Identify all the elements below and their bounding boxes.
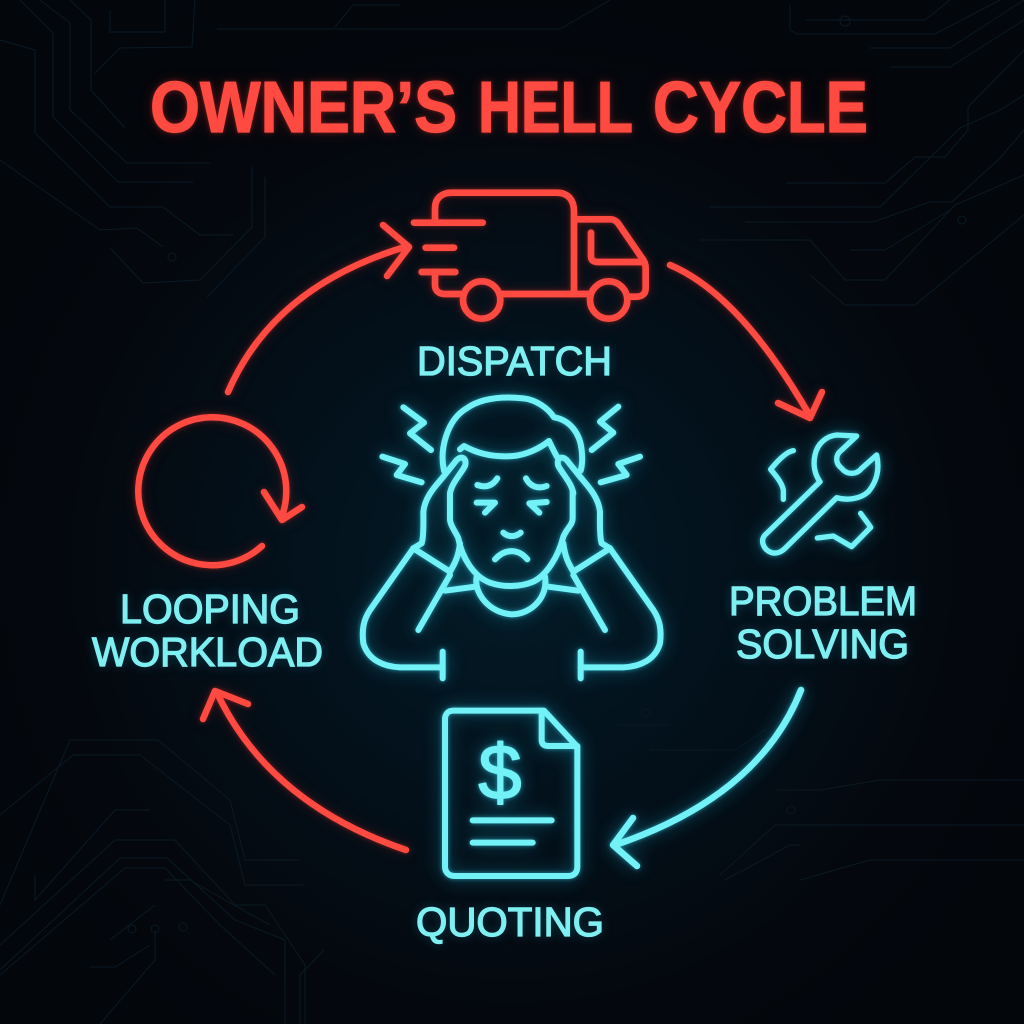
facial features [477,478,547,559]
icon: looping circular arrow [138,417,302,565]
right arm and hand [548,458,661,678]
fringe [460,441,557,457]
title: CYCLE [653,68,868,148]
icon: quote document with dollar sign: $ [478,728,522,816]
stress bolts [382,407,640,482]
label: looping workload: LOOPING [120,586,300,632]
title: HELL [478,68,633,148]
label: quoting: QUOTING [416,899,604,945]
label: problem solving [729,578,917,667]
arrow: looping workload to dispatch [228,225,409,392]
label: problem solving: PROBLEM [729,578,917,624]
icon: delivery truck [414,193,646,319]
label: looping workload: WORKLOAD [92,629,323,675]
label: looping workload [92,586,323,675]
label: problem solving: SOLVING [736,621,909,667]
neck collar [476,577,545,614]
icon: quote document with dollar sign [445,711,577,876]
title: OWNER’S [150,68,457,148]
icon: stressed person holding head [363,398,661,678]
left arm and hand [363,458,475,678]
arrow: problem solving to quoting [613,690,801,866]
arrow: dispatch to problem solving [670,265,822,418]
label: dispatch: DISPATCH [417,338,612,384]
title [150,68,868,148]
face outline [450,492,573,586]
hair [443,398,582,471]
icon: wrench [763,435,878,553]
arrow: quoting to looping workload [203,691,406,850]
